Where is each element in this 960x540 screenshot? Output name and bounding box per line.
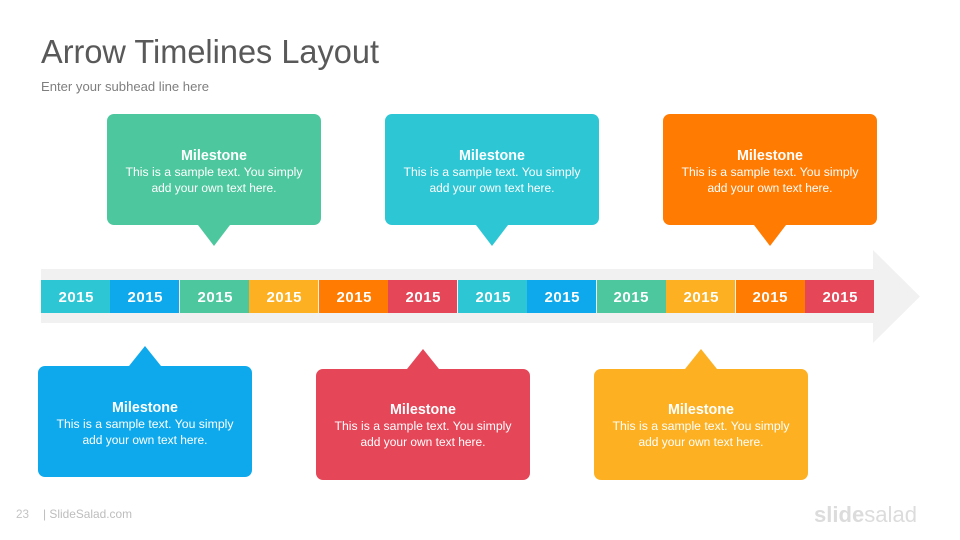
callout: blue milestone: add your own text here. <box>82 433 208 447</box>
callout: green milestone: add your own text here. <box>152 181 276 195</box>
callout: yellow milestone: Milestone <box>668 402 734 418</box>
callout: orange milestone: This is a sample text. You simply <box>682 165 859 179</box>
arrow background <box>41 250 920 343</box>
year labels <box>58 289 858 306</box>
year labels: 2015 <box>544 289 580 306</box>
year labels: 2015 <box>614 289 648 306</box>
year labels: 2015 <box>128 289 162 306</box>
year labels: 2015 <box>266 289 302 306</box>
timeline arrow <box>41 250 920 343</box>
year segments <box>41 280 874 313</box>
title: Arrow Timelines Layout <box>41 33 379 70</box>
year labels: 2015 <box>406 289 440 306</box>
callout: blue milestone: This is a sample text. You simply <box>56 417 234 431</box>
logo wordmark: slidesalad <box>814 502 917 527</box>
callout: orange milestone: add your own text here. <box>708 181 832 195</box>
callout: red milestone: This is a sample text. You simply <box>334 419 512 433</box>
callout: red milestone <box>316 349 530 480</box>
year labels: 2015 <box>198 289 232 306</box>
page number: 23 <box>16 507 29 521</box>
year labels: 2015 <box>58 289 94 306</box>
callout: teal milestone: add your own text here. <box>430 181 554 195</box>
year labels: 2015 <box>752 289 788 306</box>
year labels: 2015 <box>684 289 718 306</box>
callout: teal milestone <box>385 114 599 246</box>
subhead: Enter your subhead line here <box>41 80 209 94</box>
callout: green milestone: This is a sample text. You simply <box>126 165 303 179</box>
callout: teal milestone: This is a sample text. You simply <box>404 165 581 179</box>
year labels: 2015 <box>822 289 858 306</box>
callout: yellow milestone: add your own text here. <box>638 435 764 449</box>
callout: yellow milestone: This is a sample text. You simply <box>612 419 790 433</box>
footer site name: | SlideSalad.com <box>43 507 132 521</box>
callout: orange milestone: Milestone <box>737 148 803 164</box>
year labels: 2015 <box>336 289 372 306</box>
callout: green milestone: Milestone <box>181 148 247 164</box>
callout: teal milestone: Milestone <box>459 148 525 164</box>
callout: blue milestone <box>38 346 252 477</box>
callout: red milestone: add your own text here. <box>360 435 486 449</box>
callout: red milestone: Milestone <box>390 402 456 418</box>
callout: yellow milestone <box>594 349 808 480</box>
year labels: 2015 <box>476 289 510 306</box>
callout: blue milestone: Milestone <box>112 400 178 416</box>
callout: orange milestone <box>663 114 877 246</box>
callout: green milestone <box>107 114 321 246</box>
